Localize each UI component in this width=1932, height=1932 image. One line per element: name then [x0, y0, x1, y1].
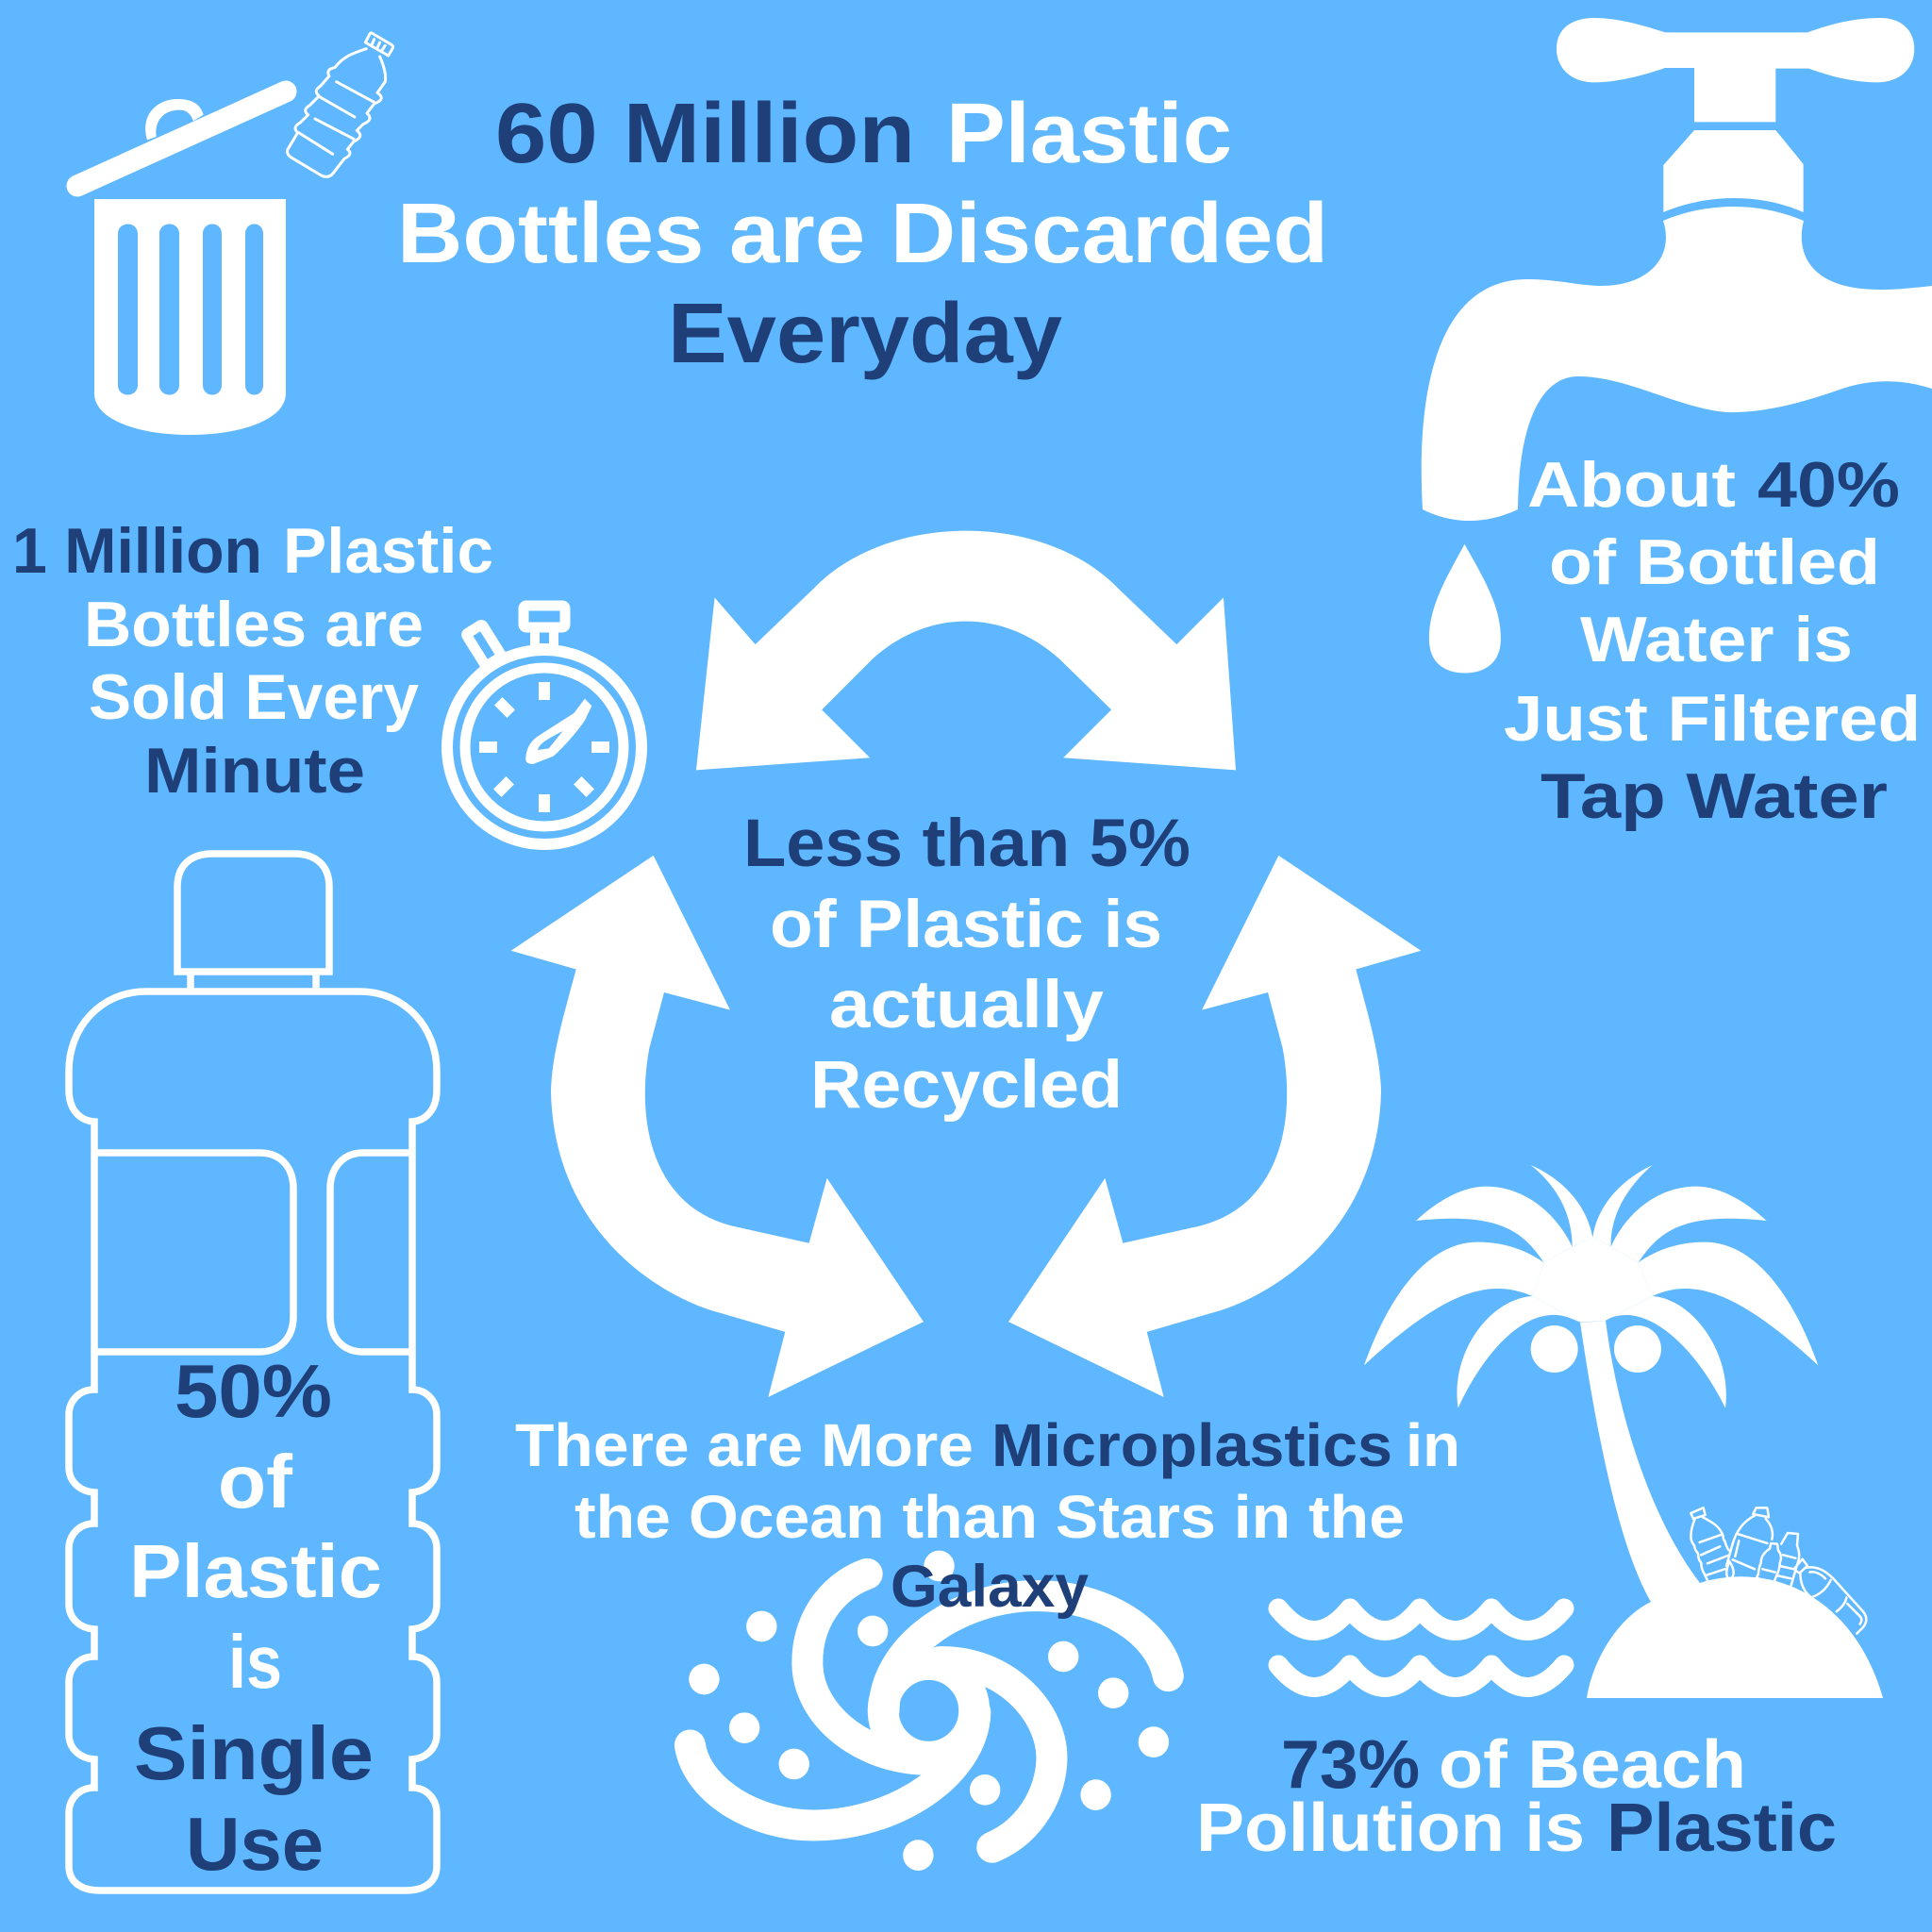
text: microplastics: Galaxy: [891, 1554, 1089, 1620]
small bottle: [288, 33, 393, 176]
icon: water tap: [1422, 18, 1932, 673]
text: microplastics: in: [1406, 1411, 1460, 1479]
text: microplastics: [515, 1411, 1460, 1620]
arrow: left: [511, 856, 924, 1397]
text: recycling: actually: [829, 968, 1105, 1042]
palm trunk and island: [1580, 1321, 1883, 1698]
title: [397, 87, 1328, 381]
text: microplastics: There are More: [515, 1411, 974, 1479]
text: bottled water: About: [1527, 449, 1736, 521]
icon: spiral galaxy: [689, 1551, 1169, 1871]
text: recycling: Less than 5%: [743, 807, 1191, 881]
text: bottles sold every minute: Sold Every: [89, 661, 419, 733]
text: single use: 50%: [175, 1349, 332, 1433]
text: beach pollution: 73%: [1281, 1727, 1420, 1803]
trash can lid: [77, 92, 286, 186]
text: beach pollution: Plastic: [1607, 1790, 1837, 1866]
text: single use: Single: [134, 1711, 374, 1795]
icon: trash can with bottle: [77, 33, 393, 435]
palm fronds and coconuts: [1364, 1165, 1818, 1408]
tap collar: [1663, 130, 1804, 212]
title: Bottles are Discarded: [397, 187, 1328, 281]
text: recycling: of Plastic is: [770, 888, 1162, 962]
water drop: [1429, 544, 1501, 673]
text: beach pollution: Pollution is: [1196, 1790, 1585, 1866]
text: bottles sold every minute: Plastic: [283, 515, 493, 587]
icon: stopwatch: [447, 606, 641, 844]
title: 60 Million: [495, 87, 915, 181]
title: Everyday: [668, 287, 1062, 381]
tap spout: [1422, 207, 1932, 521]
text: beach pollution: [1196, 1727, 1837, 1866]
tap handle: [1557, 18, 1914, 122]
text: single use: of: [218, 1440, 292, 1524]
text: bottled water: of Bottled: [1549, 526, 1880, 598]
icon: waves: [1278, 1608, 1564, 1687]
text: bottles sold every minute: [12, 515, 493, 807]
galaxy stars: [689, 1551, 1169, 1871]
text: microplastics: Microplastics: [991, 1411, 1392, 1479]
text: bottles sold every minute: 1 Million: [12, 515, 262, 587]
arrow: right: [1008, 856, 1421, 1397]
trash can body: [94, 199, 286, 435]
text: bottles sold every minute: Bottles are: [84, 589, 424, 660]
text: bottled water: Just Filtered: [1504, 683, 1921, 755]
text: bottled water: [1504, 449, 1921, 832]
text: bottled water: Tap Water: [1541, 760, 1888, 832]
text: recycling: Recycled: [810, 1048, 1123, 1123]
text: single use: Plastic: [129, 1529, 382, 1613]
icon: palm tree island: [1364, 1165, 1883, 1698]
text: bottled water: Water is: [1580, 604, 1853, 675]
recycling arrows: [511, 531, 1421, 1397]
text: single use: is: [228, 1620, 282, 1704]
text: beach pollution: of Beach: [1439, 1727, 1746, 1803]
text: bottled water: 40%: [1757, 449, 1900, 521]
text: single use: [129, 1349, 382, 1886]
icon: large bottle: [69, 854, 437, 1890]
plastic bottles on the beach: [1690, 1507, 1866, 1634]
text: bottles sold every minute: Minute: [144, 735, 365, 807]
text: microplastics: the Ocean than Stars in the: [575, 1483, 1405, 1551]
arrow: top: [696, 531, 1236, 770]
galaxy arms: [690, 1574, 1168, 1847]
title: Plastic: [946, 87, 1232, 181]
text: single use: Use: [186, 1802, 324, 1886]
text: recycling: [743, 807, 1191, 1123]
